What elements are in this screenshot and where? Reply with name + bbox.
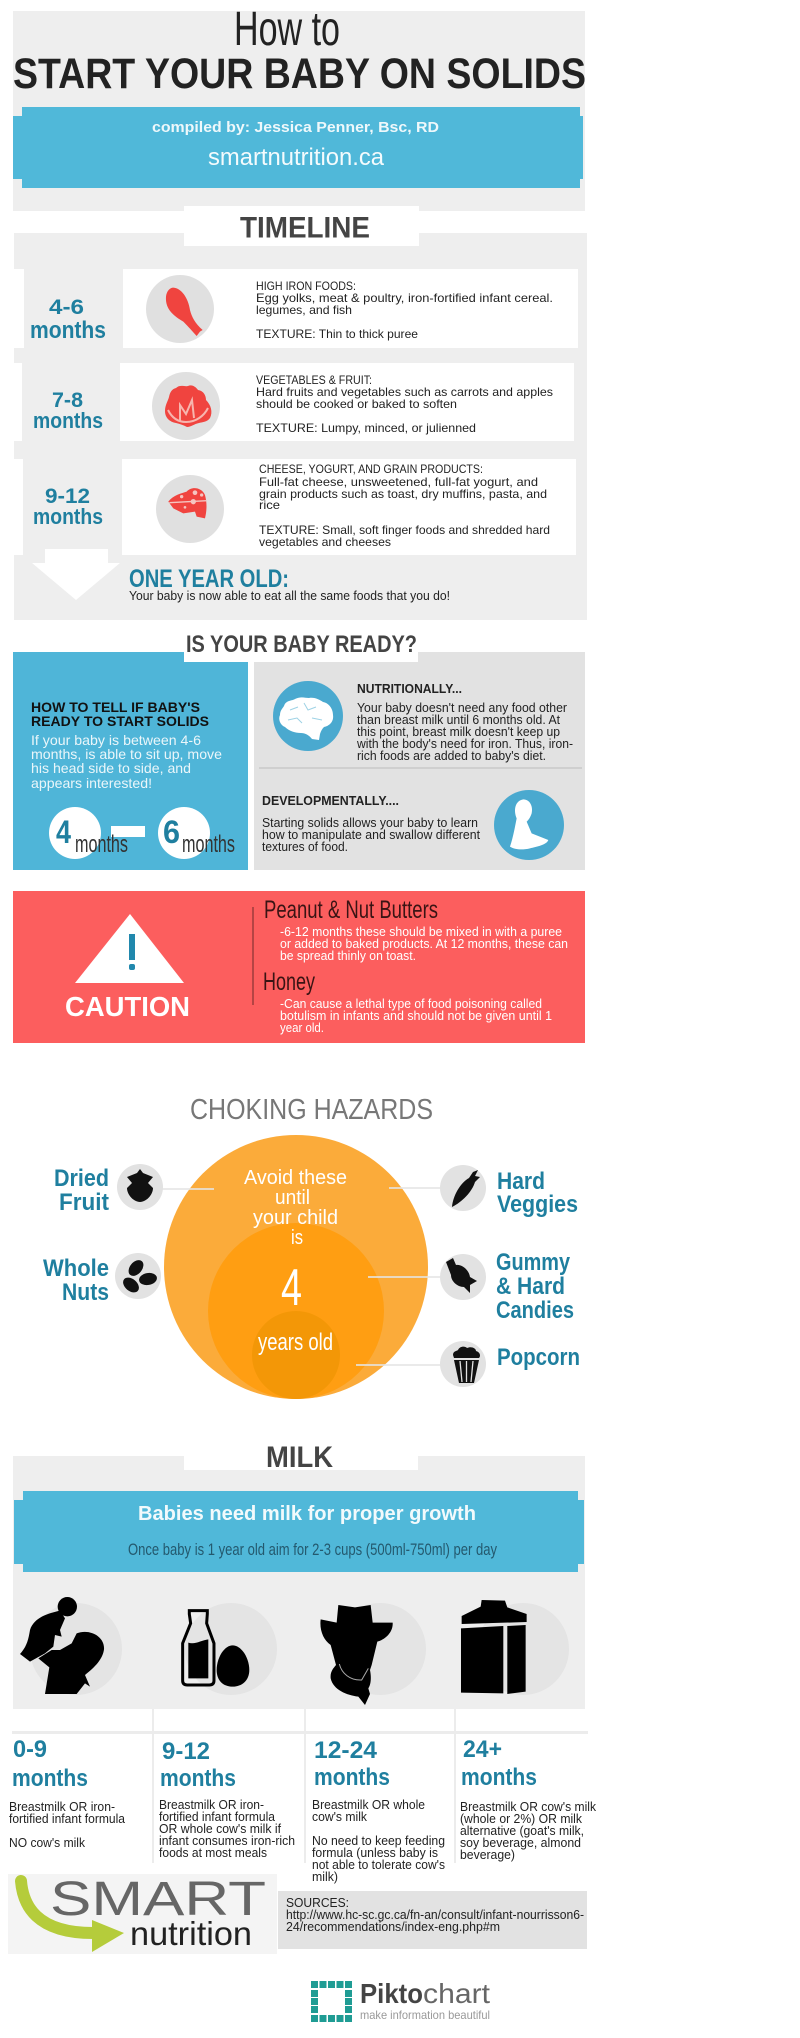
panel: nutritionally and developmentally: rich foods are added to baby's diet. (357, 748, 546, 763)
callout: one year old: Your baby is now able to eat all the same foods that you do! (129, 588, 450, 603)
panel: header (13, 3, 586, 211)
age range: 4 to 6 months: months (75, 831, 128, 858)
hazard: gummy and hard candies: Candies (496, 1297, 574, 1324)
heading: is your baby ready: IS YOUR BABY READY? (186, 631, 417, 658)
icon: baby (494, 790, 564, 860)
panel: nutritionally and developmentally: with the body's need for iron. Thus, iron- (356, 736, 573, 751)
text block: peanut and nut butters: or added to baked products. At 12 months, these can (280, 936, 568, 951)
banner: milk (14, 1491, 584, 1572)
timeline row: 9-12 months: TEXTURE: Small, soft finger foods and shredded hard (259, 523, 550, 537)
heading: choking hazards: CHOKING HAZARDS (190, 1094, 433, 1126)
column: 12-24 months: 12-24 (314, 1737, 378, 1764)
hazard: gummy and hard candies: Gummy (496, 1249, 571, 1276)
timeline row: 9-12 months: vegetables and cheeses (259, 535, 391, 549)
title: START YOUR BABY ON SOLIDS (13, 50, 586, 98)
text block: honey: -Can cause a lethal type of food poisoning called (280, 996, 542, 1011)
panel: nutritionally and developmentally: NUTRITIONALLY... (357, 681, 462, 696)
logo: smart nutrition: nutrition (130, 1915, 252, 1952)
age range: 4 to 6 months: 4 (56, 814, 71, 850)
column: 12-24 months: Breastmilk OR whole (312, 1798, 425, 1812)
chart: nested circles: until (275, 1187, 310, 1209)
timeline row: 7-8 months: TEXTURE: Lumpy, minced, or julienned (256, 421, 476, 435)
logo: piktochart: Pikto (360, 1978, 423, 2009)
column: 9-12 months: infant consumes iron-rich (159, 1834, 295, 1848)
hazard: whole nuts: Nuts (62, 1279, 109, 1306)
panel: nutritionally and developmentally: textures of food. (262, 839, 348, 854)
hazard: whole nuts: Whole (43, 1255, 109, 1282)
panel: timeline (14, 206, 587, 620)
age range: 4 to 6 months (49, 807, 235, 859)
timeline row: 7-8 months: should be cooked or baked to soften (256, 397, 457, 411)
arrow: down to one year (32, 549, 120, 600)
panel: sources (278, 1891, 587, 1949)
column: 12-24 months: cow's milk (312, 1810, 368, 1824)
column: 0-9 months: months (12, 1765, 88, 1792)
timeline row: 4-6 months: months (30, 317, 106, 344)
timeline row: 9-12 months (14, 459, 576, 555)
panel: nutritionally and developmentally: Your baby doesn't need any food other (357, 700, 568, 715)
timeline row: 4-6 months: 4-6 (49, 296, 84, 319)
panel: nutritionally and developmentally: Starting solids allows your baby to learn (262, 815, 478, 830)
panel: how to tell: months, is able to sit up, move (31, 746, 222, 762)
column: 12-24 months: No need to keep feeding (312, 1834, 445, 1848)
column: 9-12 months: foods at most meals (159, 1846, 267, 1860)
panel: caution (13, 891, 585, 1043)
timeline row: 9-12 months: 9-12 (45, 485, 90, 508)
title: How to (234, 3, 340, 56)
text block: peanut and nut butters (264, 896, 568, 963)
text block: honey: Honey (263, 968, 315, 996)
column: 9-12 months: 9-12 (162, 1738, 210, 1765)
heading: milk: MILK (266, 1441, 333, 1474)
logo: smart nutrition (8, 1873, 277, 1954)
timeline row: 4-6 months: Egg yolks, meat & poultry, iron-fortified infant cereal. (256, 291, 553, 305)
column: 12-24 months: formula (unless baby is (312, 1846, 438, 1860)
panel: how to tell: If your baby is between 4-6 (31, 732, 201, 748)
column: 0-9 months: NO cow's milk (9, 1836, 86, 1850)
panel: nutritionally and developmentally: how to manipulate and swallow different (262, 827, 480, 842)
text block: honey: year old. (280, 1020, 324, 1035)
timeline row: 9-12 months: grain products such as toast, dry muffins, pasta, and (259, 487, 547, 501)
column: 0-9 months (9, 1736, 125, 1850)
logo: piktochart: chart (423, 1978, 490, 2009)
column: 0-9 months: 0-9 (13, 1736, 47, 1763)
banner: milk: Babies need milk for proper growth (138, 1503, 476, 1525)
milk table rules (12, 1709, 588, 1863)
icon: brain (273, 681, 343, 751)
panel: caution: CAUTION (65, 991, 190, 1022)
text block: honey: botulism in infants and should not be given until 1 (280, 1008, 552, 1023)
column: 0-9 months: Breastmilk OR iron- (9, 1800, 115, 1814)
hazard: popcorn: Popcorn (497, 1344, 580, 1371)
hazard: dried fruit: Fruit (59, 1189, 109, 1216)
logo: smart nutrition: SMART (50, 1873, 266, 1926)
chart: nested circles: is (291, 1227, 303, 1249)
timeline row: 7-8 months (14, 363, 574, 441)
logo: piktochart (311, 1978, 490, 2022)
icon: warning triangle (75, 914, 184, 983)
column: 9-12 months (159, 1738, 295, 1860)
timeline row: 7-8 months: months (33, 408, 103, 433)
callout: one year old: ONE YEAR OLD: (129, 565, 289, 593)
age range: 4 to 6 months: months (182, 831, 235, 858)
timeline row: 4-6 months: HIGH IRON FOODS: (256, 279, 356, 293)
panel: milk (13, 1440, 585, 1709)
title (13, 3, 586, 98)
hazard: gummy and hard candies (440, 1249, 574, 1324)
column: 12-24 months: months (314, 1764, 390, 1791)
panel: how to tell (13, 652, 248, 870)
icon: mother and baby (20, 1597, 122, 1695)
age range: 4 to 6 months: 6 (163, 814, 180, 850)
hazard: whole nuts (43, 1253, 161, 1306)
panel: sources: http://www.hc-sc.gc.ca/fn-an/consult/infant-nourrisson6- (286, 1907, 584, 1922)
hazard: gummy and hard candies: & Hard (496, 1273, 565, 1300)
text block: honey (263, 968, 552, 1035)
column: 24+ months: soy beverage, almond (460, 1836, 581, 1850)
column: 24+ months: Breastmilk OR cow's milk (460, 1800, 597, 1814)
timeline row: 9-12 months: rice (259, 498, 280, 512)
banner: milk: Once baby is 1 year old aim for 2-3 cups (500ml-750ml) per day (128, 1540, 497, 1559)
timeline row: 9-12 months: CHEESE, YOGURT, AND GRAIN PRODUCTS: (259, 462, 483, 476)
panel: nutritionally and developmentally: than breast milk until 6 months old. At (357, 712, 560, 727)
chart: nested circles: 4 (281, 1259, 302, 1317)
column: 9-12 months: months (160, 1765, 236, 1792)
panel: how to tell: appears interested! (31, 775, 152, 791)
timeline row: 7-8 months: VEGETABLES & FRUIT: (256, 373, 372, 387)
text block: peanut and nut butters: Peanut & Nut Butters (264, 896, 438, 924)
text block: peanut and nut butters: be spread thinly on toast. (280, 948, 416, 963)
hazard: popcorn (440, 1341, 580, 1387)
column: 24+ months (460, 1736, 597, 1862)
hazard: hard veggies: Hard (497, 1168, 545, 1195)
panel: sources: 24/recommendations/index-eng.php#m (286, 1919, 500, 1934)
panel: nutritionally and developmentally: this point, breast milk doesn't keep up (357, 724, 560, 739)
heading: timeline (184, 206, 419, 246)
icon: cow (320, 1603, 426, 1705)
panel: how to tell: his head side to side, and (31, 760, 191, 776)
timeline row: 9-12 months: Full-fat cheese, unsweetened, full-fat yogurt, and (259, 475, 538, 489)
panel: sources: SOURCES: (286, 1895, 349, 1910)
timeline row: 4-6 months (14, 269, 578, 348)
panel: how to tell: READY TO START SOLIDS (31, 713, 209, 729)
column: 24+ months: beverage) (460, 1848, 515, 1862)
column: 24+ months: 24+ (463, 1736, 502, 1763)
heading: timeline: TIMELINE (240, 212, 370, 244)
column: 24+ months: (whole or 2%) OR milk (460, 1812, 583, 1826)
timeline row: 7-8 months: 7-8 (52, 389, 83, 412)
column: 12-24 months (312, 1737, 445, 1884)
timeline row: 4-6 months: legumes, and fish (256, 303, 352, 317)
column: 0-9 months: fortified infant formula (9, 1812, 125, 1826)
callout: one year old (129, 565, 450, 603)
column: 9-12 months: fortified infant formula (159, 1810, 275, 1824)
column: 24+ months: alternative (goat's milk, (460, 1824, 584, 1838)
hazard: hard veggies: Veggies (497, 1191, 578, 1218)
hazard: dried fruit: Dried (54, 1165, 109, 1192)
column: 24+ months: months (461, 1764, 537, 1791)
banner: author: compiled by: Jessica Penner, Bsc, RD (152, 119, 439, 136)
chart: nested circles: Avoid these (244, 1167, 347, 1189)
panel: nutritionally and developmentally: DEVELOPMENTALLY.... (262, 793, 399, 808)
icon: milk bottle and egg (183, 1603, 277, 1695)
panel: nutritionally and developmentally (184, 630, 585, 870)
chart: nested circles (162, 1135, 443, 1399)
chart: nested circles: your child (253, 1207, 338, 1229)
heading: milk (184, 1440, 418, 1474)
banner: author (13, 107, 583, 188)
banner: author: smartnutrition.ca (208, 144, 385, 171)
timeline row: 7-8 months: Hard fruits and vegetables such as carrots and apples (256, 385, 553, 399)
column: 9-12 months: Breastmilk OR iron- (159, 1798, 264, 1812)
hazard: dried fruit (54, 1164, 163, 1216)
hazard: hard veggies (440, 1165, 578, 1218)
timeline row: 4-6 months: TEXTURE: Thin to thick puree (256, 327, 418, 341)
chart: nested circles: years old (258, 1329, 333, 1356)
text block: peanut and nut butters: -6-12 months these should be mixed in with a puree (280, 924, 562, 939)
icon: milk carton (461, 1600, 569, 1695)
column: 9-12 months: OR whole cow's milk if (159, 1822, 282, 1836)
panel: how to tell: HOW TO TELL IF BABY'S (31, 699, 200, 715)
column: 12-24 months: not able to tolerate cow's (312, 1858, 445, 1872)
column: 12-24 months: milk) (312, 1870, 338, 1884)
timeline row: 9-12 months: months (33, 504, 103, 529)
logo: piktochart: make information beautiful (360, 2008, 490, 2022)
